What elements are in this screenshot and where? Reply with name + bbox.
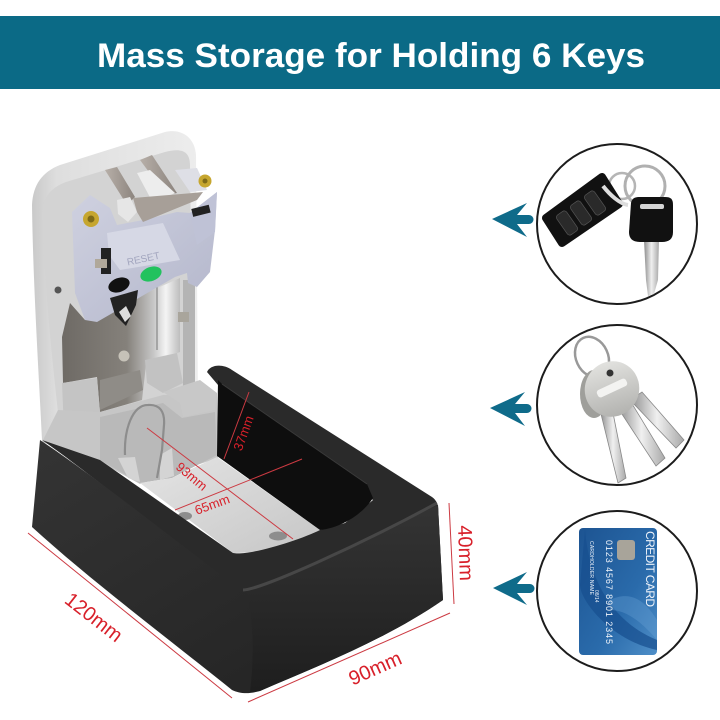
dimension labels: 65mm bbox=[193, 491, 232, 518]
front face bbox=[32, 440, 443, 693]
card text: 08/14 bbox=[593, 590, 599, 603]
dimension labels bbox=[60, 414, 477, 690]
title banner bbox=[0, 16, 720, 89]
lock body bbox=[72, 192, 217, 322]
circle: credit card bbox=[537, 511, 697, 671]
card text: CARDHOLDER NAME bbox=[588, 541, 594, 596]
chip bbox=[617, 540, 635, 560]
dimension labels: 90mm bbox=[346, 648, 405, 690]
inner floor bbox=[140, 457, 320, 553]
dimension lines bbox=[28, 392, 454, 702]
dimension labels: 37mm bbox=[230, 414, 257, 453]
arrow: credit card bbox=[493, 572, 534, 605]
circle: house keys bbox=[537, 325, 697, 485]
wire loop bbox=[125, 405, 164, 478]
green and black labels bbox=[138, 264, 164, 284]
dimension labels: 120mm bbox=[60, 589, 126, 647]
card text: CREDIT CARD bbox=[643, 531, 657, 607]
card text: 0123 4567 8901 2345 bbox=[604, 540, 614, 644]
arrow: house keys bbox=[490, 392, 532, 426]
black box rim and walls bbox=[32, 366, 443, 693]
circle: car key fob and key bbox=[537, 144, 697, 304]
title: Mass Storage for Holding 6 Keys bbox=[97, 37, 645, 75]
card text bbox=[588, 531, 657, 644]
dimension labels: 40mm bbox=[453, 525, 477, 581]
steel plate bbox=[62, 278, 180, 412]
open lid: RESET bbox=[126, 251, 161, 268]
latch bbox=[105, 167, 135, 205]
grey hinge and tray bbox=[42, 380, 218, 484]
arrow: car key fob bbox=[492, 203, 534, 237]
open lid bbox=[32, 131, 217, 445]
product: key lock box bbox=[32, 131, 443, 693]
brass screws bbox=[83, 211, 99, 227]
right face bbox=[246, 505, 443, 692]
dimension labels: 93mm bbox=[173, 459, 210, 494]
